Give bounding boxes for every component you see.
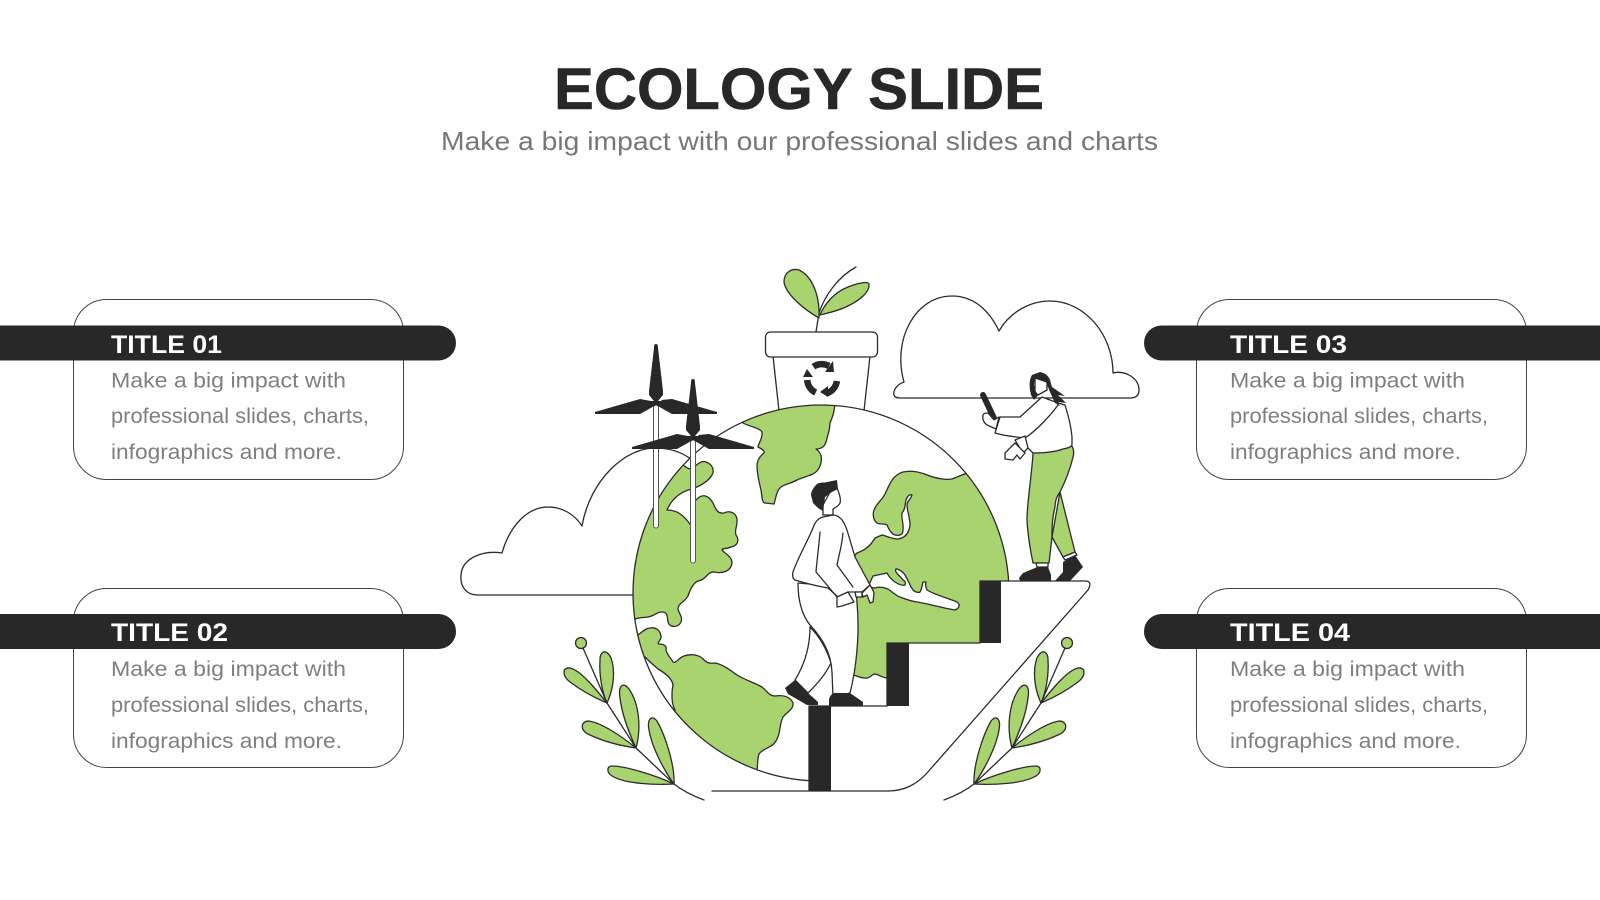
panel: title 04 [1144, 588, 1600, 768]
white sea [868, 569, 959, 610]
panel: title 01 [0, 300, 456, 480]
globe outline [633, 405, 1009, 781]
panel: title 02: Make a big impact with [111, 658, 346, 681]
panel: title 02: TITLE 02 [111, 619, 228, 647]
panel: title 03: TITLE 03 [1230, 331, 1347, 359]
panel: title 01: Make a big impact with [111, 370, 346, 392]
panel: title 04: Make a big impact with [1230, 658, 1465, 681]
panel: title 02: infographics and more. [111, 730, 342, 753]
panel: title 03 [1144, 300, 1600, 480]
staircase [712, 581, 1090, 791]
panel: title 04: infographics and more. [1230, 730, 1461, 753]
panel: title 01: professional slides, charts, [111, 405, 369, 428]
icon: left cloud [461, 448, 692, 595]
land: north [742, 406, 836, 505]
panel: title 02: professional slides, charts, [111, 694, 369, 717]
panel: title 01: TITLE 01 [111, 331, 222, 359]
icon: right leaf branch [944, 638, 1084, 800]
icon: wind turbine front [632, 379, 754, 563]
icon: right cloud [894, 296, 1139, 398]
panel: title 02 [0, 588, 456, 768]
panel: title 03: professional slides, charts, [1230, 405, 1488, 428]
man climbing the stairs [785, 480, 874, 706]
icon: wind turbine rear [595, 344, 717, 528]
panel: title 04: professional slides, charts, [1230, 694, 1488, 717]
woman with tablet [983, 372, 1083, 581]
land: west continent [634, 460, 738, 628]
icon: left leaf branch [564, 638, 704, 800]
land: americas [638, 627, 794, 770]
subtitle: Make a big impact with our professional slides and charts [441, 126, 1158, 156]
panel: title 03: Make a big impact with [1230, 370, 1465, 392]
icon: plant pot with recycling symbol [766, 267, 878, 420]
panel: title 01: infographics and more. [111, 441, 342, 464]
globe [632, 404, 1010, 782]
land: eurasia [854, 470, 1008, 679]
panel: title 03: infographics and more. [1230, 441, 1461, 464]
panel: title 04: TITLE 04 [1230, 619, 1350, 647]
title: ECOLOGY SLIDE [554, 57, 1044, 122]
